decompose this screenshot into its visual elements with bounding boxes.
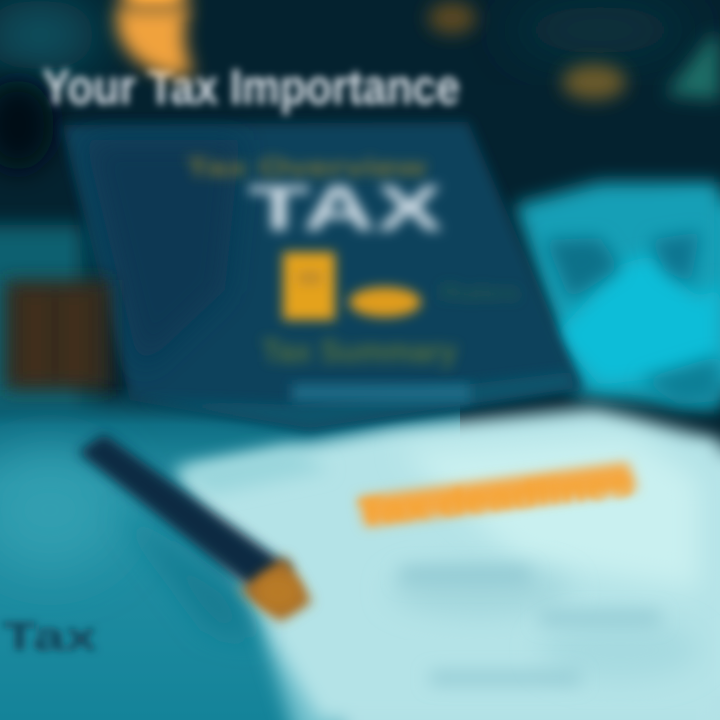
orange highlighted text on paper: [357, 462, 638, 532]
top orange lights: [428, 2, 720, 100]
dark label bottom left: Tax: [2, 615, 97, 659]
tablet big word: TAX: TAX: [248, 172, 443, 244]
paper grey text lines: [400, 568, 660, 684]
pen: [78, 434, 312, 640]
top title: Your Tax Importance: [42, 59, 460, 115]
background: teal desk: [0, 385, 460, 720]
brown object left: [5, 280, 110, 390]
tablet orange figure: [283, 252, 421, 320]
tablet blue text line: [292, 384, 470, 402]
orange crescent top: [117, 0, 194, 76]
tablet heading line: Tax Overview: [186, 152, 427, 182]
tablet body: [62, 122, 583, 432]
paper sheet: [175, 408, 720, 720]
tablet side detail lines: Rates: [440, 280, 520, 305]
tablet olive text line: Tax Summary: [262, 333, 457, 369]
orange highlighted text on paper: Tax deadlines: [357, 465, 634, 532]
background: bright teal right band: [515, 182, 720, 410]
